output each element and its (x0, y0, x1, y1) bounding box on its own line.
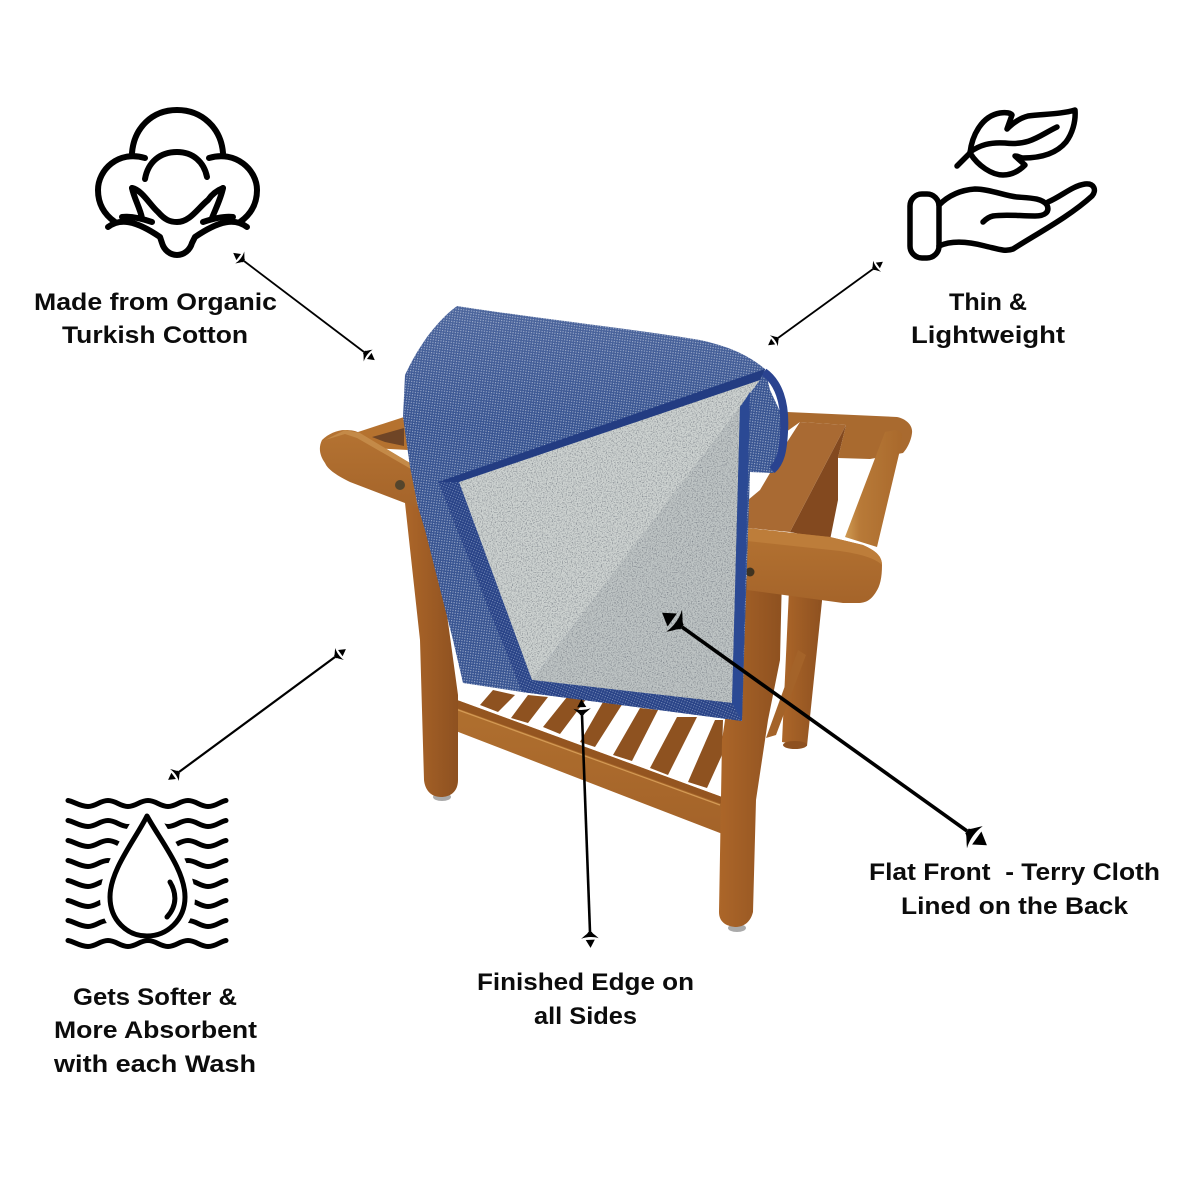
icon: water drop with waves (68, 800, 226, 946)
towel: lower terry panel (532, 405, 740, 703)
arrow: cotton callout (229, 247, 379, 366)
stool: front shelf bar (448, 700, 722, 834)
text: Gets Softer & More Absorbent with each Wash (53, 984, 257, 1078)
stool: rear left rail (358, 417, 408, 450)
towel: roll navy edge (764, 372, 784, 470)
text: Thin & Lightweight: Thin & (949, 289, 1027, 316)
text: Made from Organic Turkish Cotton: Made from Organic (34, 289, 277, 316)
stool: back rail (786, 412, 912, 459)
stool: right front arm (746, 528, 882, 603)
icon: cotton boll (98, 110, 257, 255)
text: Gets Softer & More Absorbent with each Wash: Gets Softer & (73, 984, 237, 1011)
stool: right side rail (845, 430, 902, 547)
text: Gets Softer & More Absorbent with each Wash: with each Wash (53, 1051, 256, 1078)
text: Finished Edge on all Sides: Finished Edge on (477, 969, 694, 996)
arrow: flat front callout (655, 601, 994, 857)
text: Made from Organic Turkish Cotton (34, 289, 277, 349)
text: Gets Softer & More Absorbent with each Wash: More Absorbent (54, 1017, 257, 1044)
stool: left arm (320, 430, 418, 508)
arrow: lightweight callout (764, 257, 887, 350)
text: Made from Organic Turkish Cotton: Turkish Cotton (62, 322, 248, 349)
towel: upper terry flap (459, 380, 760, 680)
text: Flat Front - Terry Cloth Lined on the Back (869, 859, 1160, 920)
stool: shelf slats (480, 690, 723, 788)
text: Finished Edge on all Sides: all Sides (534, 1003, 637, 1030)
text: Thin & Lightweight (911, 289, 1065, 349)
arrow: finished edge callout (573, 699, 599, 948)
arrow: softer callout (164, 643, 350, 786)
towel: bottom border (522, 680, 742, 721)
photo: wooden stool with folded towel (320, 306, 912, 932)
stool: front left leg (405, 503, 458, 801)
stool: seat dark back leg (790, 425, 846, 540)
stool: front right leg (719, 575, 782, 932)
towel: top light (403, 306, 765, 507)
text: Flat Front - Terry Cloth Lined on the Back: Flat Front - Terry Cloth (869, 859, 1160, 886)
text: Finished Edge on all Sides (477, 969, 694, 1030)
text: Thin & Lightweight: Lightweight (911, 322, 1065, 349)
towel: left border (438, 482, 532, 692)
text: Flat Front - Terry Cloth Lined on the Back: Lined on the Back (901, 893, 1129, 920)
stool: back right leg and brace (766, 590, 822, 749)
icon: feather over open hand (910, 110, 1094, 258)
towel: right border (732, 392, 750, 721)
towel: woven blue body (403, 306, 784, 721)
towel: top border (438, 369, 765, 482)
stool: seat slat (748, 422, 846, 532)
